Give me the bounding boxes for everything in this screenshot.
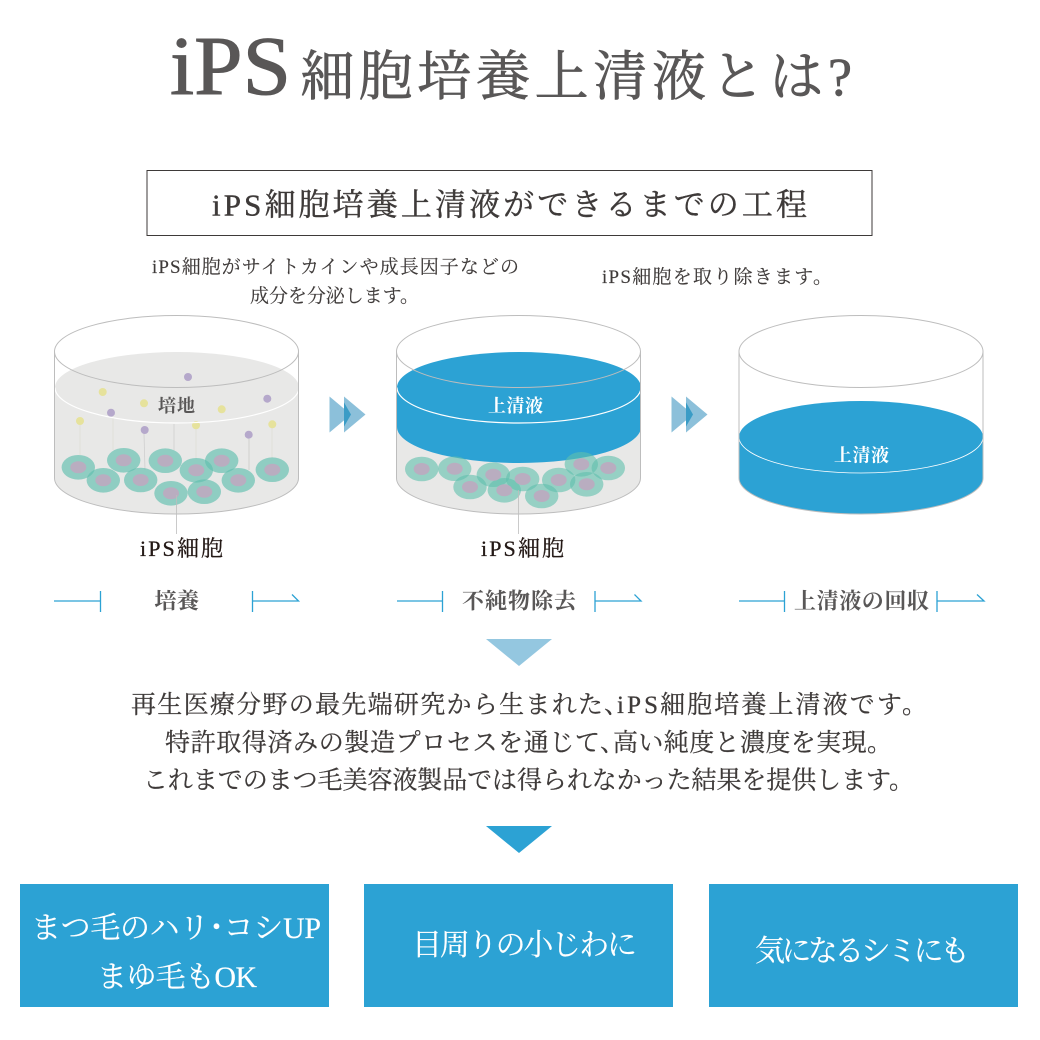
body text: 再生医療分野の最先端研究から生まれた xyxy=(131,691,603,719)
dish 1 medium xyxy=(55,352,299,514)
title xyxy=(170,20,852,113)
dish 1 medium front edge xyxy=(55,388,299,423)
dish 3 supernatant front edge xyxy=(739,437,983,473)
label: iPS cell 1: iPS細胞 xyxy=(140,536,223,561)
dish 1 label: 培地 xyxy=(158,396,195,416)
benefit box 2: 目周りの小じわに xyxy=(412,929,637,962)
body text: 、 xyxy=(604,692,629,719)
span: culture: 培養 xyxy=(154,588,199,614)
arrow: step 1 to 2 xyxy=(330,396,366,432)
dish 2 glass outline xyxy=(396,352,640,514)
body text: 細胞培養上清液です。 xyxy=(660,691,927,719)
dish 2 rim xyxy=(396,316,640,388)
body text: iPS xyxy=(617,692,658,719)
span: supernatant collection: 上清液の回収 xyxy=(794,588,929,614)
span: culture xyxy=(54,588,298,614)
dish 2 cells xyxy=(405,452,625,508)
dish 2 lower liquid xyxy=(397,427,641,514)
body text: 高い純度と濃度を実現。 xyxy=(613,729,892,757)
benefit box 1: まゆ毛もOK xyxy=(97,961,257,994)
body text xyxy=(131,691,927,794)
span: impurity removal: 不純物除去 xyxy=(462,588,577,614)
dish 2 supernatant front edge xyxy=(397,388,641,423)
dish 1 yellow dots xyxy=(76,388,276,429)
arrow: step 2 to 3 xyxy=(672,396,708,432)
dish 3 supernatant xyxy=(739,401,983,514)
body text: 、 xyxy=(600,730,625,757)
benefit box 3 xyxy=(709,884,1018,1007)
heading box: process: iPS細胞培養上清液ができるまでの工程 xyxy=(212,188,807,222)
dish 3 rim xyxy=(739,316,983,388)
benefit box 1: まつ毛のハリ･コシUP xyxy=(31,912,321,945)
dish 1 glass outline xyxy=(54,352,298,514)
body text: 特許取得済みの製造プロセスを通じて xyxy=(165,729,600,757)
title: 細胞培養上清液とは? xyxy=(300,47,852,107)
dish 1 purple dots xyxy=(107,373,271,439)
heading box: process xyxy=(147,170,872,236)
dish 2 supernatant xyxy=(397,352,641,463)
benefit box 2 xyxy=(364,884,673,1007)
dish 2 leader line xyxy=(518,490,520,534)
span: impurity removal xyxy=(397,588,641,614)
text: step 1 description: 成分を分泌します。 xyxy=(250,285,419,307)
dish 1 secretion threads xyxy=(80,417,272,470)
body text: これまでのまつ毛美容液製品では得られなかった結果を提供します。 xyxy=(143,766,914,794)
text: step 2 description: iPS細胞を取り除きます。 xyxy=(602,266,832,288)
span: supernatant collection xyxy=(739,588,984,614)
dish 1: culture xyxy=(54,316,299,534)
label: iPS cell 2: iPS細胞 xyxy=(481,536,564,561)
dish 3: supernatant collection xyxy=(739,316,983,514)
dish 3 glass outline xyxy=(739,352,983,514)
dish 2: impurity removal xyxy=(396,316,641,534)
arrow: pale down triangle xyxy=(486,639,552,666)
dish 1 cells xyxy=(62,448,289,506)
dish 2 label: 上清液 xyxy=(488,396,543,416)
benefit box 3: 気になるシミにも xyxy=(755,935,970,968)
dish 1 leader line xyxy=(176,495,178,534)
text: step 1 description: iPS細胞がサイトカインや成長因子などの xyxy=(152,256,519,278)
title: iPS xyxy=(170,20,291,113)
text: step 1 description xyxy=(152,256,519,307)
dish 3 label: 上清液 xyxy=(834,446,889,466)
benefit box 1 xyxy=(20,884,329,1007)
arrow: blue down triangle xyxy=(486,826,552,853)
dish 1 rim xyxy=(54,316,298,388)
